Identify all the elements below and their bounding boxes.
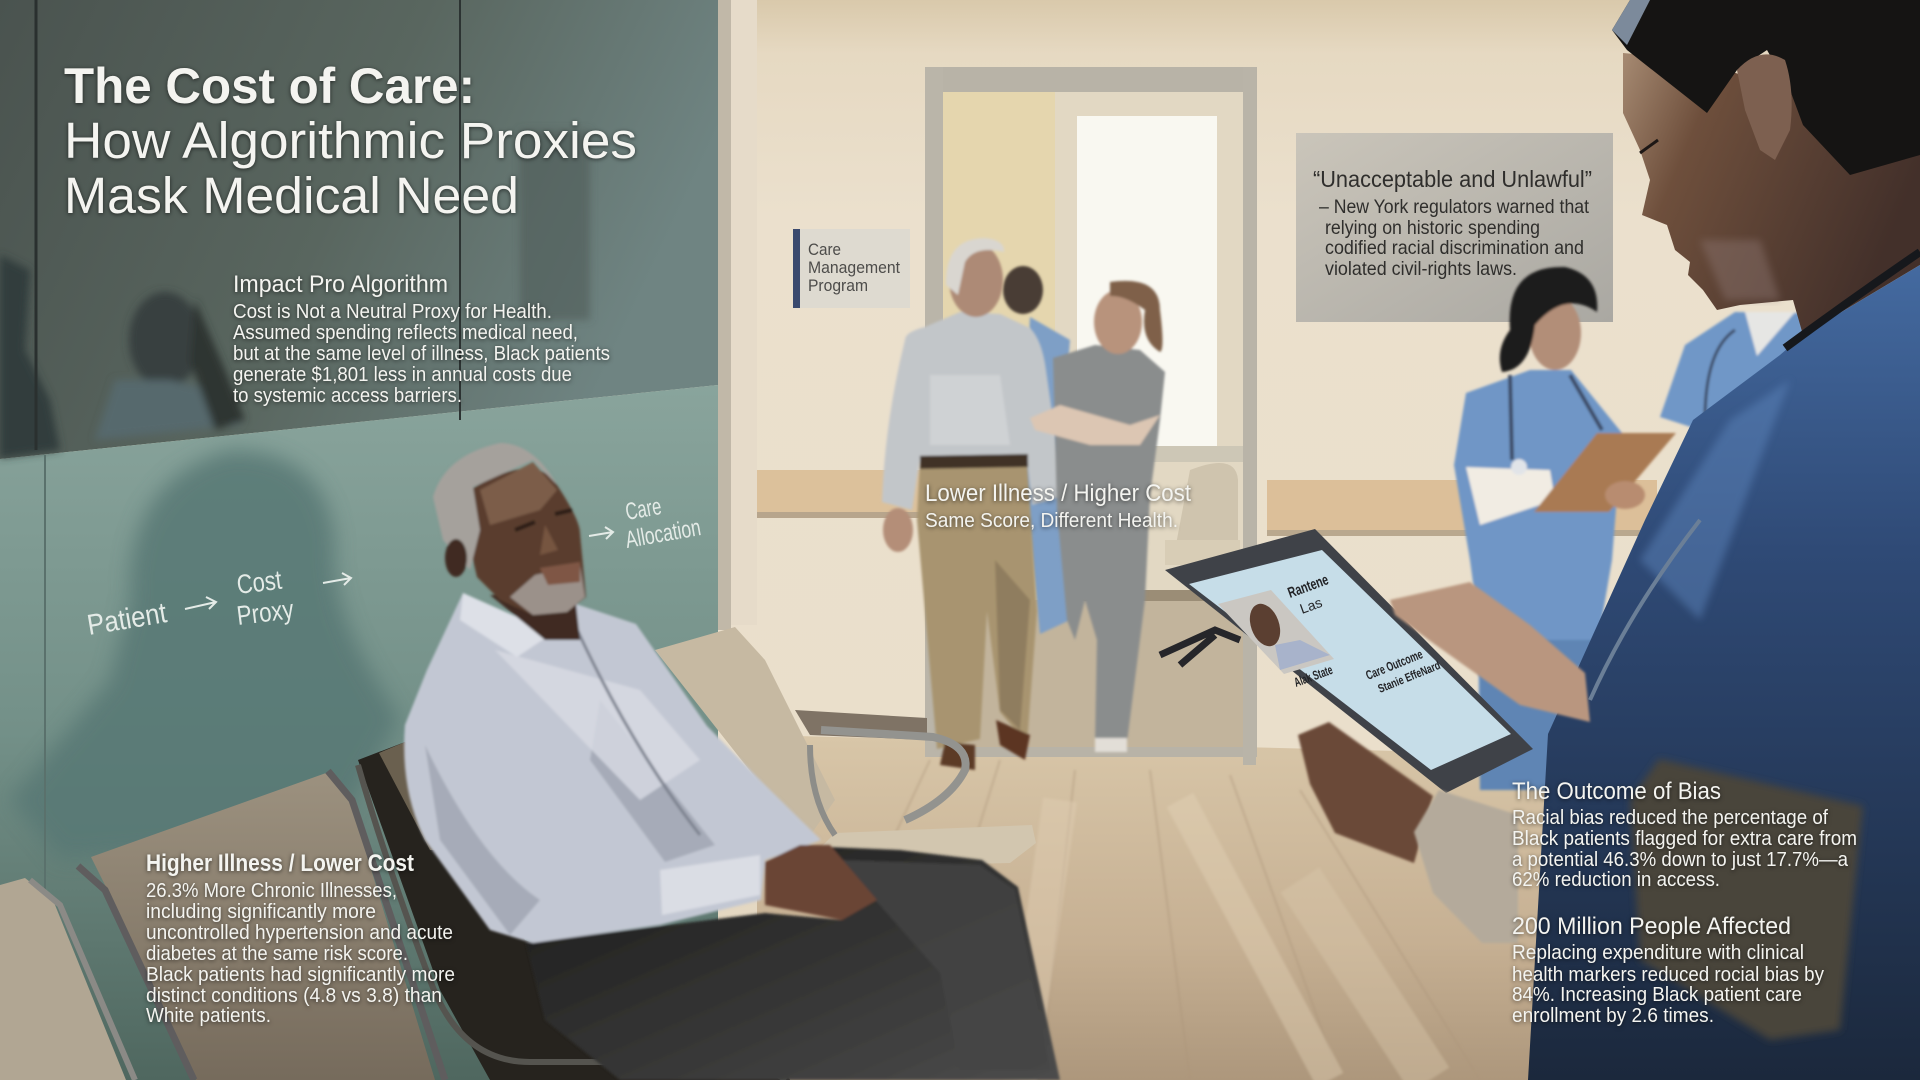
quote body xyxy=(1319,196,1590,280)
doorway to care room xyxy=(925,67,1257,765)
cost proxy label: Proxy xyxy=(235,594,296,631)
cost proxy label xyxy=(235,565,296,631)
text block: higher illness lower cost: White patients. xyxy=(146,1005,271,1027)
text block: 200 million people affected: 84%. Increasing Black patient care xyxy=(1512,984,1802,1006)
text block: impact pro algorithm: generate $1,801 less in annual costs due xyxy=(233,364,572,386)
title xyxy=(64,58,637,224)
cost proxy label: Cost xyxy=(235,565,284,600)
text block: impact pro algorithm: but at the same level of illness, Black patients xyxy=(233,343,610,365)
baseboard xyxy=(795,710,927,740)
text block: the outcome of bias: Racial bias reduced the percentage of xyxy=(1512,807,1828,829)
glass wall xyxy=(0,0,718,1080)
text block: lower illness higher cost: Same Score, Different Health. xyxy=(925,510,1178,532)
right chair xyxy=(655,627,835,850)
glass frame column xyxy=(718,0,757,630)
undersleeve xyxy=(1630,759,1863,1040)
care allocation label: Allocation xyxy=(623,514,703,554)
collar xyxy=(460,593,573,657)
foreground nurse xyxy=(1528,0,1920,1080)
text block: the outcome of bias: 62% reduction in access. xyxy=(1512,869,1720,891)
text block: higher illness lower cost: 26.3% More Chronic Illnesses, xyxy=(146,880,397,902)
patient chair xyxy=(358,742,790,1080)
beard and features xyxy=(510,565,585,615)
sign: care management program xyxy=(793,229,910,308)
tablet interface text: Care Outcome xyxy=(1364,646,1425,683)
text block: the outcome of bias: The Outcome of Bias xyxy=(1512,778,1721,805)
tablet interface text: Alak State xyxy=(1292,662,1335,690)
hair and face xyxy=(1612,0,1920,335)
patient label: Patient xyxy=(85,597,169,642)
text block: impact pro algorithm: to systemic access barriers. xyxy=(233,385,462,407)
text block: 200 million people affected: health markers reduced rocial bias by xyxy=(1512,964,1824,986)
seated patient xyxy=(404,443,1060,1080)
tablet interface text: Las xyxy=(1298,594,1324,617)
title: Mask Medical Need xyxy=(64,167,519,224)
text block: lower illness higher cost xyxy=(925,480,1191,532)
walking patient xyxy=(882,238,1064,770)
office chair xyxy=(1160,463,1240,665)
text block: impact pro algorithm xyxy=(233,271,610,407)
tablet interface text: Rantene xyxy=(1286,571,1331,602)
middle chair back xyxy=(91,773,435,1080)
floor planks xyxy=(780,760,1480,1080)
tablet interface text: Stanie EffeNard xyxy=(1376,658,1442,696)
text block: the outcome of bias xyxy=(1512,778,1857,891)
arrow xyxy=(185,597,216,609)
text block: impact pro algorithm: Cost is Not a Neutral Proxy for Health. xyxy=(233,301,552,323)
text block: 200 million people affected: 200 Million People Affected xyxy=(1512,913,1791,940)
text block: impact pro algorithm: Assumed spending reflects medical need, xyxy=(233,322,578,344)
ear xyxy=(1737,54,1792,160)
background clinician in blue xyxy=(1003,266,1070,634)
text block: the outcome of bias: a potential 46.3% down to just 17.7%—a xyxy=(1512,849,1849,871)
text block: 200 million people affected xyxy=(1512,913,1824,1027)
text block: higher illness lower cost xyxy=(146,850,455,1027)
text block: 200 million people affected: Replacing expenditure with clinical xyxy=(1512,942,1804,964)
care allocation label: Care xyxy=(623,493,663,526)
right handrail xyxy=(1267,480,1657,536)
text block: higher illness lower cost: distinct conditions (4.8 vs 3.8) than xyxy=(146,985,442,1007)
shirt xyxy=(404,593,821,943)
right hand xyxy=(1390,582,1590,722)
left chair xyxy=(0,878,126,1080)
floor xyxy=(757,735,1560,1080)
text block: higher illness lower cost: diabetes at the same risk score. xyxy=(146,943,408,965)
plaque xyxy=(1296,133,1613,322)
text block: impact pro algorithm: Impact Pro Algorithm xyxy=(233,271,448,298)
left handrail xyxy=(757,470,927,518)
quote heading: “Unacceptable and Unlawful” xyxy=(1313,166,1592,192)
quote body: codified racial discrimination and xyxy=(1325,237,1584,259)
head xyxy=(466,469,586,615)
hands xyxy=(765,845,877,920)
title: The Cost of Care: xyxy=(64,58,475,114)
care allocation label xyxy=(623,493,703,554)
quote body: relying on historic spending xyxy=(1325,217,1540,239)
window xyxy=(1077,116,1217,446)
sign: care management program: Program xyxy=(808,277,868,295)
ear xyxy=(445,539,467,577)
flow diagram: patient to cost proxy to care allocation xyxy=(85,493,703,642)
patient photo xyxy=(1218,590,1334,674)
hair xyxy=(433,443,557,570)
text block: higher illness lower cost: uncontrolled hypertension and acute xyxy=(146,922,453,944)
sign: care management program: Care xyxy=(808,241,841,259)
quote body: violated civil-rights laws. xyxy=(1325,258,1517,280)
second clinician behind foreground nurse xyxy=(1660,312,1805,430)
tablet and hands xyxy=(1165,529,1590,943)
scrub top xyxy=(1528,265,1920,1080)
reflected figures xyxy=(0,130,590,458)
trousers xyxy=(526,847,1060,1080)
text block: lower illness higher cost: Lower Illness / Higher Cost xyxy=(925,480,1191,507)
nurse with clipboard xyxy=(1454,267,1676,790)
text block: higher illness lower cost: Higher Illness / Lower Cost xyxy=(146,850,414,877)
text block: higher illness lower cost: Black patients had significantly more xyxy=(146,964,455,986)
text block: higher illness lower cost: including significantly more xyxy=(146,901,376,923)
left hand xyxy=(1298,722,1433,863)
quote body: – New York regulators warned that xyxy=(1319,196,1590,218)
tablet interface text xyxy=(1286,571,1442,696)
walking nurse xyxy=(1030,281,1165,752)
neck xyxy=(490,595,580,640)
arrow xyxy=(323,573,351,585)
bench xyxy=(0,627,1036,1080)
arrow xyxy=(589,527,613,539)
sign: care management program: Management xyxy=(808,259,900,277)
text block: the outcome of bias: Black patients flagged for extra care from xyxy=(1512,828,1857,850)
sleeve xyxy=(1414,790,1518,943)
text block: 200 million people affected: enrollment by 2.6 times. xyxy=(1512,1005,1714,1027)
title: How Algorithmic Proxies xyxy=(64,112,637,169)
